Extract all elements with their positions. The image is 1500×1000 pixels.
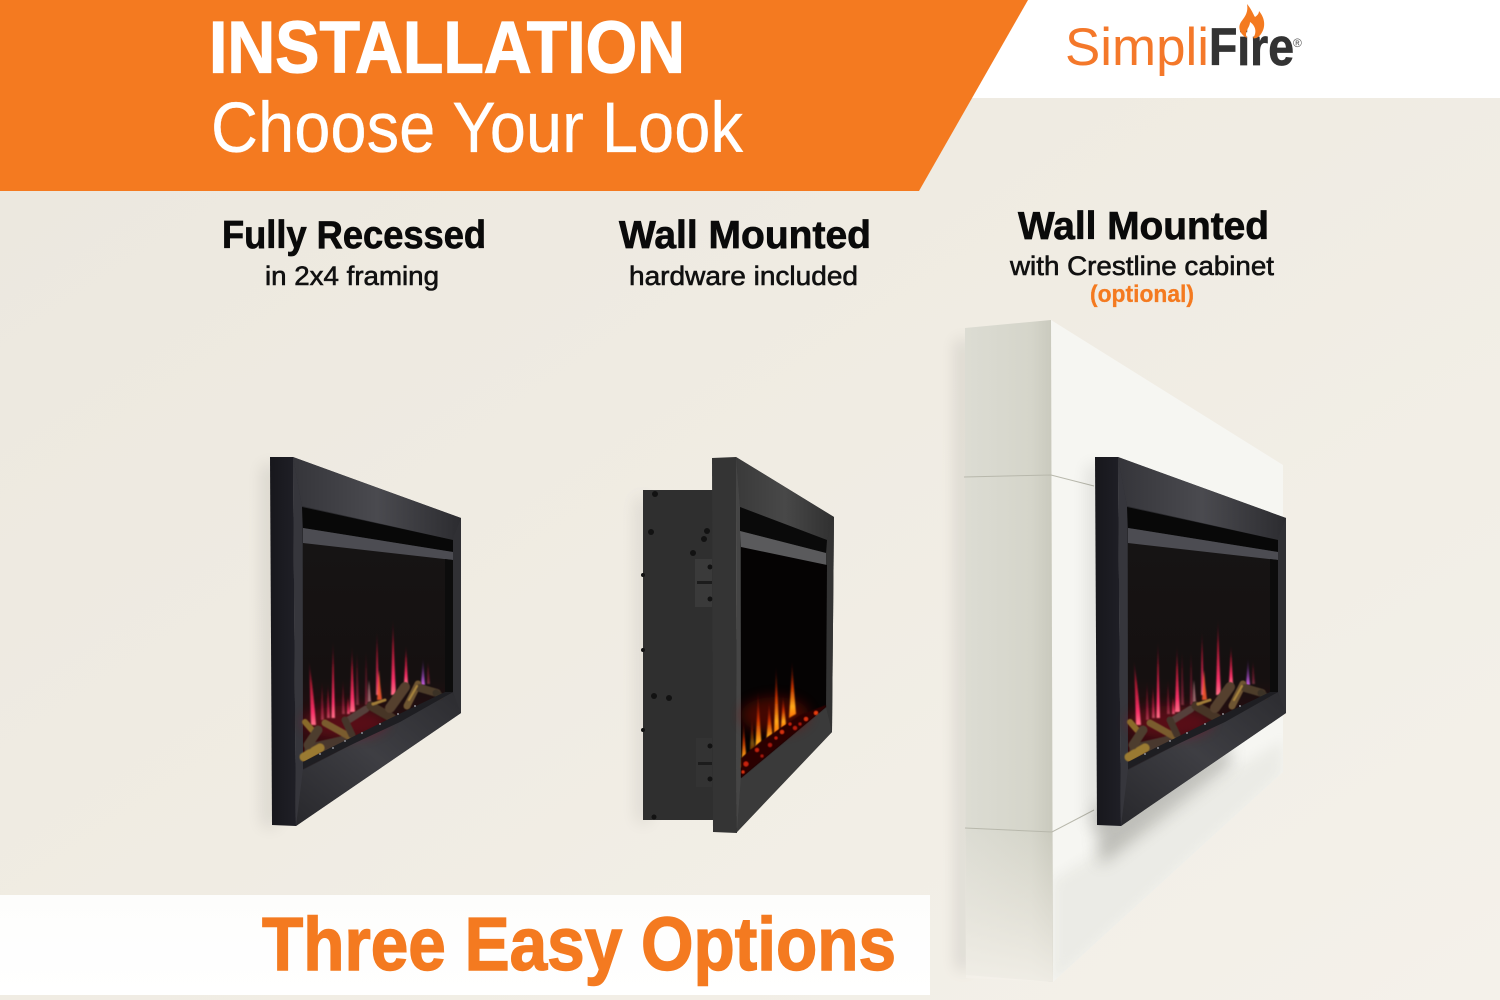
embers	[741, 705, 826, 778]
logo registered mark: ®	[1293, 36, 1302, 50]
logs	[304, 684, 440, 757]
sub text: in 2x4 framing	[265, 261, 439, 291]
bracket slot	[697, 581, 712, 584]
frame backing	[293, 457, 461, 826]
screws	[641, 491, 712, 820]
cabinet bottom fade	[965, 830, 1053, 982]
cabinet front face	[965, 320, 1053, 982]
trim bar	[303, 528, 453, 561]
seams	[964, 475, 1094, 832]
orange glow	[741, 697, 809, 733]
crestline cabinet	[956, 320, 1283, 985]
orange header banner	[0, 0, 1028, 191]
mounting bracket lower	[696, 738, 712, 787]
heading: Wall Mounted with Crestline cabinet	[1009, 205, 1275, 308]
fireplace: wall mounted with hardware	[636, 457, 834, 833]
logo: SimpliFire	[1065, 4, 1302, 77]
frame bottom	[737, 707, 832, 832]
sub text: with Crestline cabinet	[1009, 251, 1275, 281]
frame bevel left	[293, 457, 303, 826]
fireplace: on cabinet	[1087, 457, 1286, 827]
sub text: hardware included	[629, 261, 858, 291]
cabinet right face	[1051, 320, 1283, 982]
flames	[741, 660, 796, 768]
bracket plate	[695, 559, 712, 607]
logo wordmark bold part: Fire	[1209, 18, 1294, 77]
glass pebbles	[303, 692, 453, 769]
heading text: Wall Mounted	[1018, 205, 1269, 248]
vent slot	[740, 507, 827, 553]
glass firebox	[303, 543, 453, 769]
trim bar	[740, 531, 826, 565]
heading: Wall Mounted hardware included	[619, 214, 871, 291]
frame bevel left	[736, 457, 741, 832]
soft wall shadow	[262, 465, 278, 827]
mounting bracket upper	[695, 559, 712, 607]
heading: Fully Recessed	[222, 214, 486, 291]
fireplace: fully recessed	[262, 457, 461, 827]
front strip	[712, 457, 737, 833]
dark glass side	[445, 559, 453, 696]
frame bottom	[296, 692, 461, 826]
white logo band	[960, 0, 1500, 98]
soft wall shadow	[636, 498, 650, 823]
heading: Three Easy Options: Three Easy Options	[262, 902, 896, 986]
optional note: (optional)	[1090, 281, 1194, 308]
frame top	[736, 457, 834, 540]
pebble highlights	[319, 705, 416, 755]
side box	[643, 490, 713, 820]
ember bed	[741, 705, 826, 778]
glass firebox	[741, 547, 827, 778]
logo wordmark: Simpli	[1065, 18, 1209, 77]
vent slot	[302, 507, 453, 552]
cabinet shadow	[956, 340, 970, 970]
frame top	[293, 457, 461, 540]
front strip	[270, 457, 296, 826]
frame right	[826, 517, 834, 732]
bracket slot	[698, 762, 712, 765]
bracket plate	[696, 738, 712, 787]
subtitle: Choose Your Look: Choose Your Look	[211, 89, 743, 168]
bottom white band	[0, 895, 930, 995]
frame right	[453, 518, 461, 713]
logo flame icon	[1239, 4, 1264, 38]
red glow	[303, 706, 387, 738]
pebble bed	[303, 692, 453, 769]
heading text: Fully Recessed	[222, 214, 486, 257]
heading text: Wall Mounted	[619, 214, 871, 257]
flames	[309, 618, 430, 725]
frame backing	[736, 457, 834, 832]
cabinet lower shading	[1053, 740, 1283, 985]
title: INSTALLATION: INSTALLATION	[209, 8, 685, 88]
